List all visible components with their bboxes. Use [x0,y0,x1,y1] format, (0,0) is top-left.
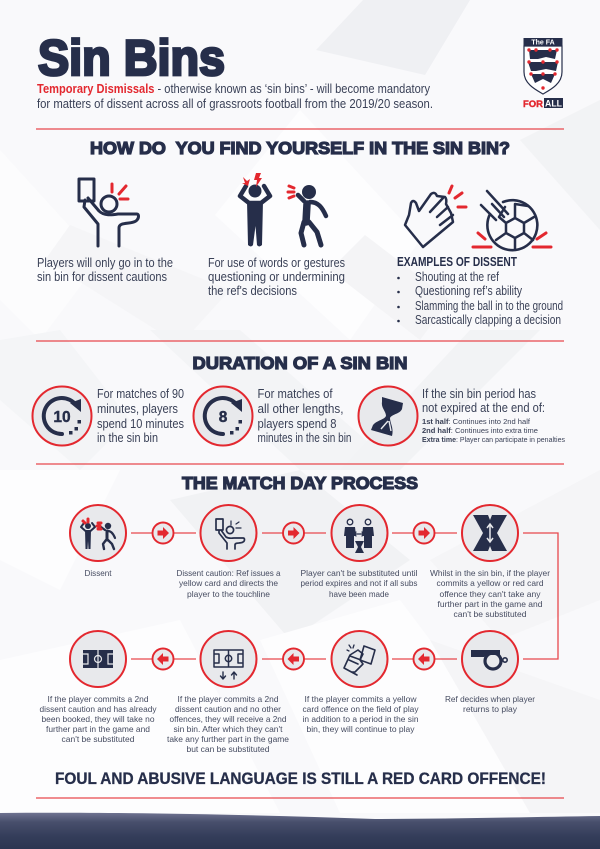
text: use of words or gestures: the ref's decisions [208,284,297,298]
icon: 8 minute timer: 8 [219,409,228,426]
step 7: second sin bin [167,631,289,754]
step 8: second dissent when booked: can't be substituted [62,734,135,744]
step 7: second sin bin: take any further part in the game [167,734,289,744]
step 6: yellow card offence: card offence on the field of play [302,704,419,714]
intro text [37,82,433,111]
text: examples list: EXAMPLES OF DISSENT [397,255,517,269]
text: players only go in for dissent [37,256,173,284]
step 1: dissent: Dissent [84,568,112,578]
step 6: yellow card offence: bin, they will continue to play [306,724,415,734]
logo: The FA crest: The FA [531,40,555,47]
step 8: second dissent when booked: further part in the game and [46,724,150,734]
connector lines [131,533,558,659]
text: other lengths: all other lengths, [258,402,344,416]
panel: gestures column [208,173,345,298]
text: 90 minutes: For matches of 90 [97,387,184,401]
step 4: whilst in the sin bin: further part in the game and [438,599,543,609]
step 4: whilst in the sin bin: can't be substituted [454,609,527,619]
text: players only go in for dissent: sin bin for dissent cautions [37,270,167,284]
step 8: second dissent when booked: been booked, they will take no [42,714,155,724]
text: use of words or gestures: questioning or undermining [208,270,345,284]
icon: frustrated players [240,173,326,246]
step 7: second sin bin: sin bin. After which they can't [174,724,283,734]
text: examples list: Questioning ref’s ability [415,284,523,298]
icon: 10 minute timer [32,386,92,446]
icon: referee showing card [79,179,138,246]
logo: The FA crest: FOR [523,99,543,110]
text: 90 minutes: in the sin bin [97,431,158,445]
panel: examples of dissent [397,186,563,327]
text: use of words or gestures: For use of words or gestures [208,256,345,270]
step 4: whilst in the sin bin: Whilst in the sin bin, if the player [430,568,550,578]
step 4: whilst in the sin bin: offence they can't take any [440,589,541,599]
step 7: second sin bin: If the player commits a 2nd [178,694,279,704]
step 7: second sin bin: but can be substituted [186,744,270,754]
panel: period not expired [358,386,566,446]
step 3: no substitution: Player can't be substituted until [300,568,418,578]
step 6: yellow card offence: If the player commits a yellow [304,694,417,704]
flow arrows [152,522,434,670]
text: half time rules: 2nd half : Continues into extra time [422,428,538,435]
step 8: second dissent when booked: dissent caution and has already [40,704,157,714]
step 5: ref decides: Ref decides when player [445,694,535,704]
step 3: no substitution [300,505,418,599]
step 7: second sin bin: dissent caution and no other [175,704,281,714]
step 3: no substitution: period expires and not if all subs [300,578,418,588]
step 2: dissent caution: player to the touchline [187,589,270,599]
icon: 10 minute timer: 10 [53,409,71,426]
text: half time rules: not expired at the end of: [422,401,545,415]
step 1: dissent [70,505,126,578]
step 4: whilst in the sin bin: commits a yellow or red card [436,578,544,588]
heading: match day process: THE MATCH DAY PROCESS [182,473,418,493]
step 4: whilst in the sin bin [430,505,550,619]
text: 90 minutes [97,387,184,445]
step 5: ref decides: returns to play [463,704,518,714]
text: 90 minutes: spend 10 minutes [97,417,184,431]
panel: 90 minute matches [32,386,184,446]
step 8: second dissent when booked: If the player commits a 2nd [48,694,149,704]
step 5: ref decides [445,631,535,714]
logo: The FA crest [523,38,563,110]
text: 90 minutes: minutes, players [97,402,178,416]
text: use of words or gestures [208,256,345,298]
text: players only go in for dissent: Players will only go in to the [37,256,173,270]
text: other lengths: For matches of [258,387,333,401]
closing statement: FOUL AND ABUSIVE LANGUAGE IS STILL A RED CARD OFFENCE! [55,769,546,788]
step 6: yellow card offence [302,631,419,734]
text: half time rules [422,387,566,444]
logo: The FA crest: ALL [545,99,562,109]
text: other lengths: players spend 8 [258,417,337,431]
panel: referee column [37,179,173,284]
step 8: second dissent when booked [40,631,157,744]
step 3: no substitution: have been made [329,589,389,599]
icon: hourglass [358,386,418,446]
text: half time rules: 1st half : Continues into 2nd half [422,419,530,426]
text: examples list: Slamming the ball in to the ground [415,299,563,313]
intro text: for matters of dissent across all of grassroots football from the 2019/20 season. [37,97,433,111]
icon: 8 minute timer [194,386,252,446]
step 2: dissent caution: yellow card and directs the [179,578,278,588]
step 7: second sin bin: offences, they will receive a 2nd [170,714,287,724]
title: Sin Bins [38,30,225,86]
text: examples list: Shouting at the ref [415,270,499,284]
heading: duration: DURATION OF A SIN BIN [192,353,408,373]
intro text: Temporary Dismissals - otherwise known as ‘sin bins’ - will become mandatory [37,82,431,96]
footer band [0,813,600,849]
step 2: dissent caution [176,505,281,599]
text: half time rules: If the sin bin period has [422,387,536,401]
text: half time rules: Extra time: Player can participate in penalties [422,437,566,444]
text: examples list [397,255,563,327]
panel: other length matches [194,386,352,446]
text: other lengths [258,387,352,445]
step 2: dissent caution: Dissent caution: Ref issues a [176,568,281,578]
step 6: yellow card offence: in addition to a period in the sin [302,714,419,724]
text: examples list: Sarcastically clapping a decision [415,313,561,327]
icon: clapping hands [405,186,466,247]
heading: how do you find yourself: HOW DO YOU FIND YOURSELF IN THE SIN BIN? [90,138,510,158]
text: other lengths: minutes in the sin bin [258,431,352,445]
icon: ball slammed [473,191,551,250]
